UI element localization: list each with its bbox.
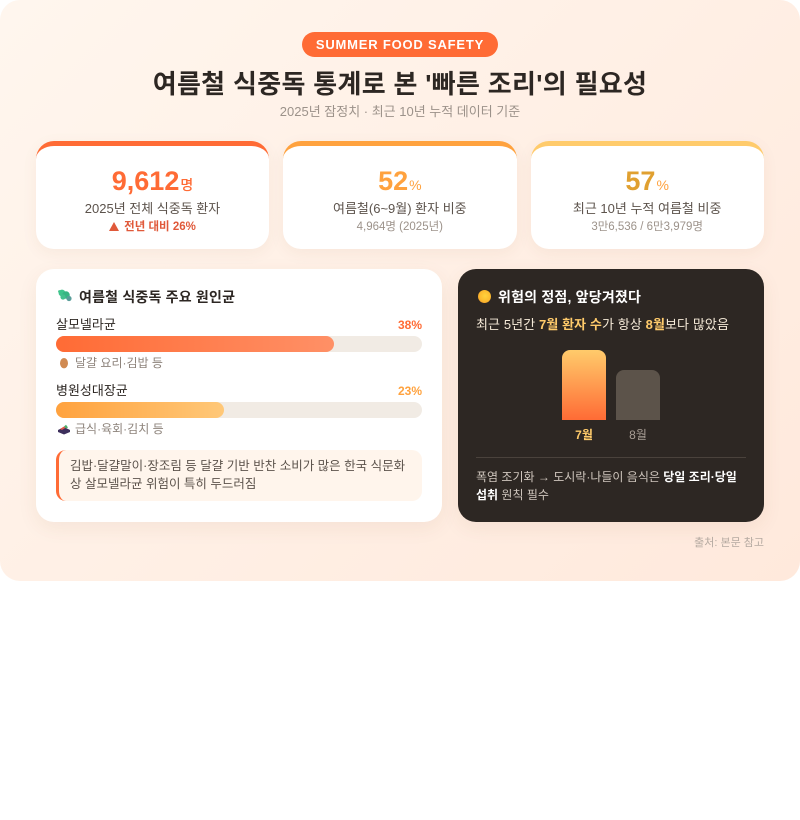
label: August: 8월 (629, 428, 647, 442)
chart: July vs August (562, 350, 660, 442)
stat value: 52%: 52% (378, 166, 422, 196)
value: 38%: 38% (398, 318, 422, 332)
title: 여름철 식중독 통계로 본 '빠른 조리'의 필요성 (153, 69, 647, 99)
stat detail: 4,964명 (2025년) (357, 221, 443, 233)
panel heading: peak risk: 위험의 정점, 앞당겨졌다 (498, 289, 641, 305)
label: EHEC: 병원성대장균 (56, 383, 128, 398)
stat change: 전년 대비 26% (124, 221, 196, 233)
label: July: 7월 (575, 428, 593, 442)
stat detail: 3만6,536 / 6만3,979명 (591, 221, 703, 233)
stat value: 57%: 57% (625, 166, 669, 196)
bar: August (616, 370, 660, 420)
stat label: 여름철(6~9월) 환자 비중 (333, 201, 467, 216)
icon: lunch box (58, 424, 70, 434)
panel conclusion: 섭취 원칙 필수 (476, 488, 549, 502)
infographic background panel (0, 0, 800, 581)
icon: sun (478, 290, 491, 303)
badge: summer food safety (302, 32, 498, 57)
panel: peak risk (458, 269, 764, 522)
badge: summer food safety: SUMMER FOOD SAFETY (316, 37, 484, 52)
panel conclusion (476, 470, 737, 502)
icon: egg (60, 358, 68, 368)
label: salmonella: 살모넬라균 (56, 317, 116, 332)
subtitle: 2025년 잠정치 · 최근 10년 누적 데이터 기준 (280, 104, 520, 119)
stat card: total patients (36, 141, 269, 249)
bar: salmonella (56, 336, 422, 352)
panel conclusion: 폭염 조기화 → 도시락·나들이 음식은 당일 조리·당일 (476, 470, 737, 484)
note: salmonella foods: 달걀 요리·김밥 등 (75, 356, 163, 370)
stat card: ten year share (531, 141, 764, 249)
callout: Korean food culture (56, 450, 422, 501)
bar: EHEC (56, 402, 422, 418)
value: 23%: 23% (398, 384, 422, 398)
icon: microbe (58, 290, 72, 302)
callout: Korean food culture: 김밥·달걀말이·장조림 등 달걀 기반 반찬 소비가 많은 한국 식문화 (70, 459, 405, 473)
stat value: 9,612: 9,612명 (112, 166, 193, 196)
panel: pathogens (36, 269, 442, 522)
panel heading: pathogens: 여름철 식중독 주요 원인균 (79, 289, 235, 305)
stat card: summer share (283, 141, 517, 249)
source note: 출처: 본문 참고 (694, 537, 764, 549)
note: EHEC foods: 급식·육회·김치 등 (75, 422, 164, 436)
panel statement: 최근 5년간 7월 환자 수가 항상 8월보다 많았음 (476, 317, 729, 332)
bar: July (562, 350, 606, 420)
stat label: 2025년 전체 식중독 환자 (85, 201, 220, 216)
stat label: 최근 10년 누적 여름철 비중 (573, 201, 721, 216)
callout: Korean food culture: 상 살모넬라균 위험이 특히 두드러짐 (70, 476, 256, 490)
